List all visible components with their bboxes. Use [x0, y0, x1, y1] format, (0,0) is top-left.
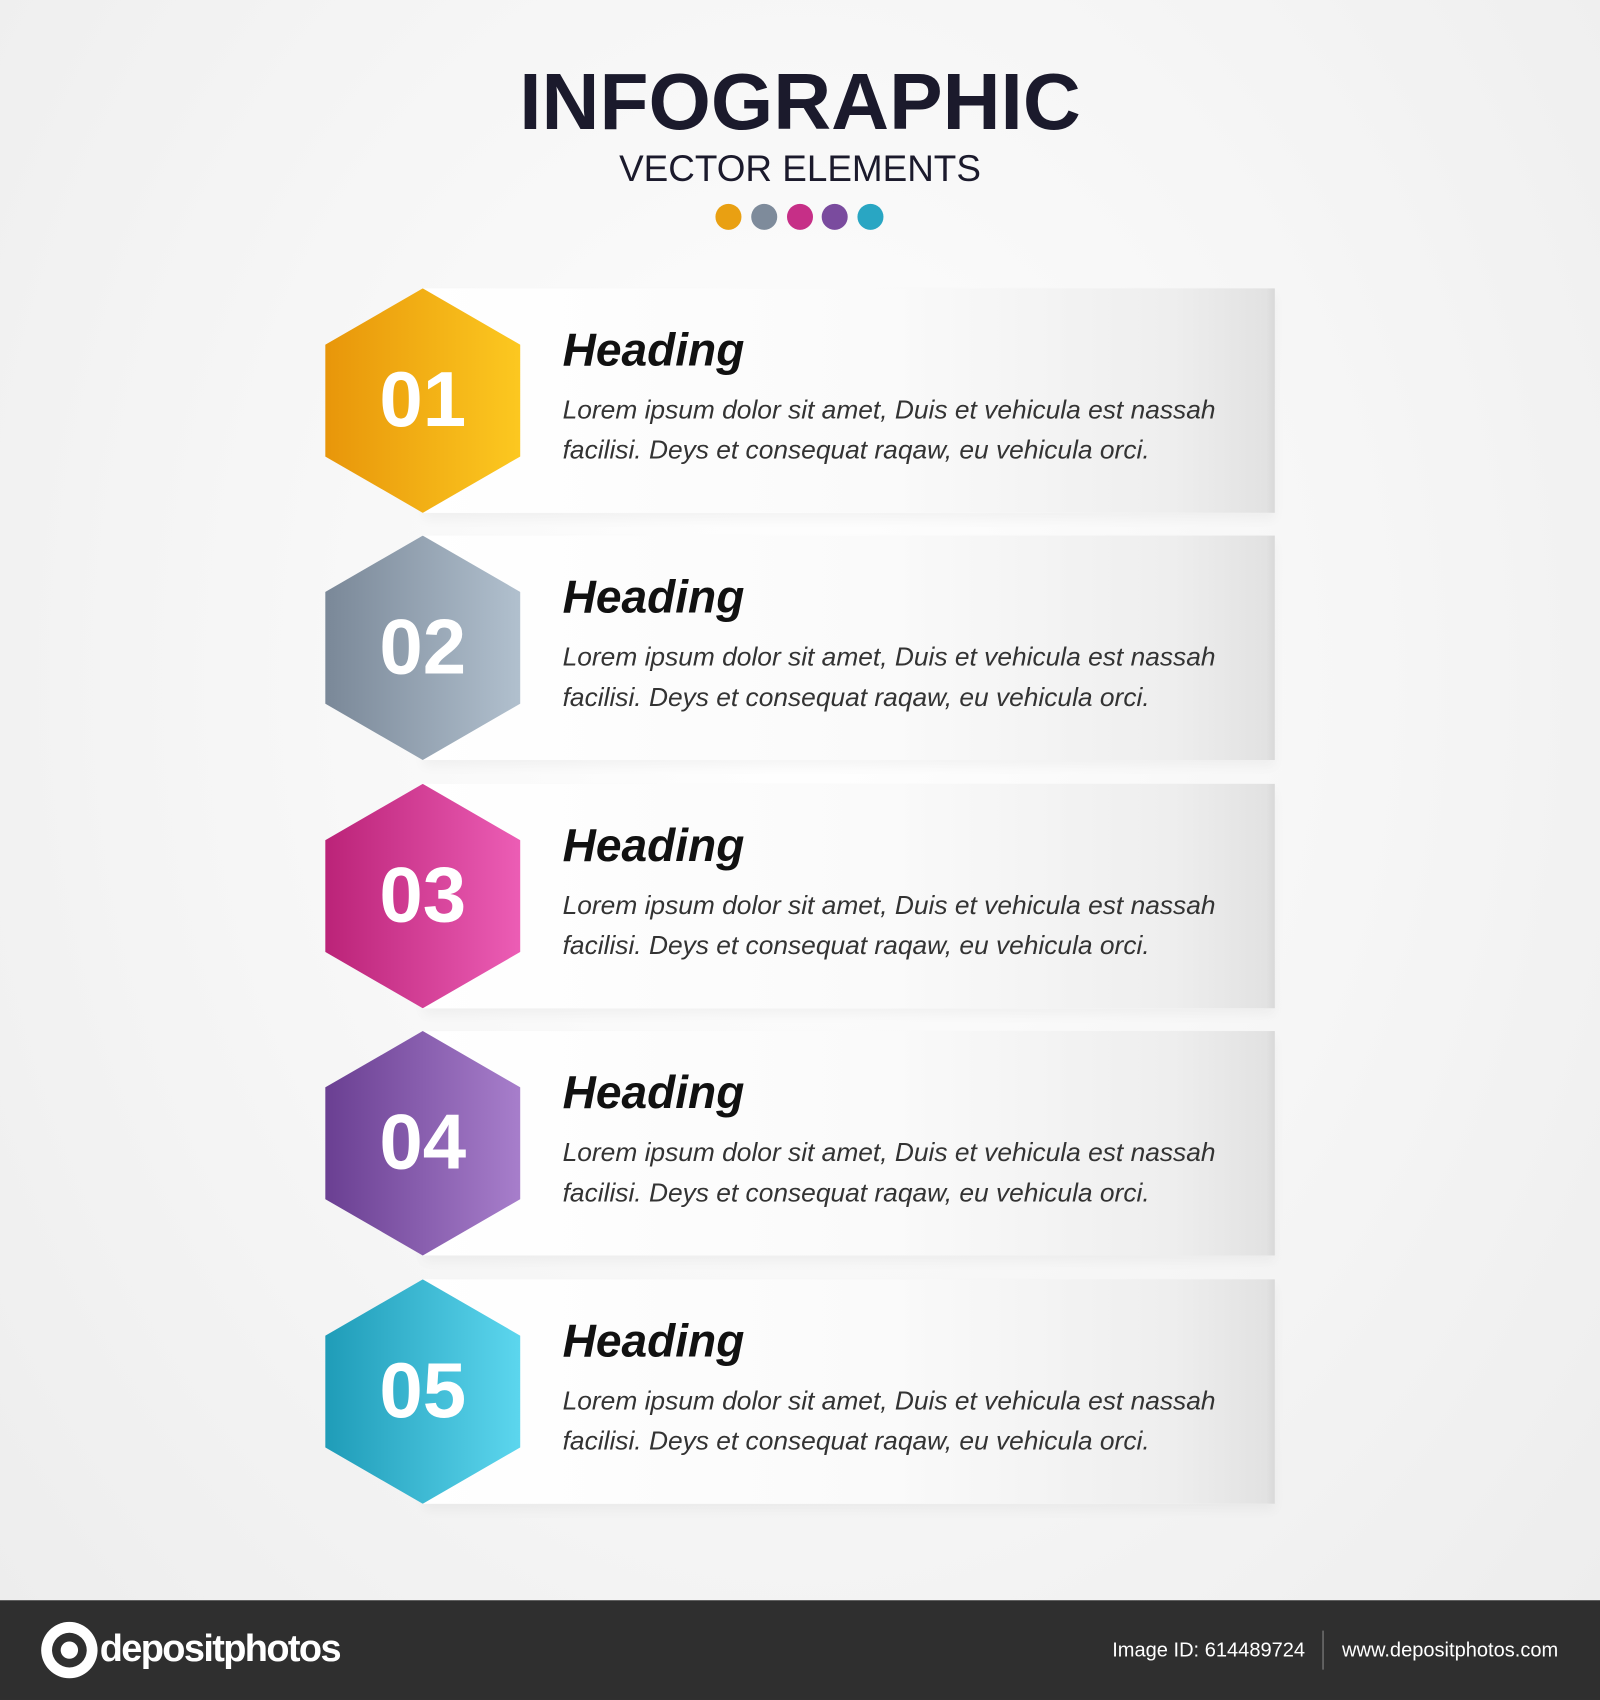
- text 03: [563, 891, 1216, 961]
- hexagon 02: [325, 536, 520, 760]
- text 01: facilisi. Deys et consequat raqaw, eu vehicula orci.: [563, 436, 1150, 465]
- step 02: [325, 536, 1275, 760]
- heading 01: Heading: [563, 325, 744, 376]
- text 04: Lorem ipsum dolor sit amet, Duis et vehicula est nassah: [563, 1138, 1216, 1168]
- text 03: Lorem ipsum dolor sit amet, Duis et vehicula est nassah: [563, 891, 1216, 920]
- step 03: [325, 784, 1275, 1008]
- step 01: [325, 288, 1275, 513]
- step 02: 02: [379, 604, 466, 691]
- step 04: 04: [379, 1099, 466, 1186]
- text 05: [563, 1387, 1216, 1456]
- hexagon 04: [325, 1031, 520, 1256]
- footer bar: [0, 1600, 1600, 1700]
- image id: Image ID: 614489724: [1112, 1638, 1305, 1661]
- logo icon: [41, 1622, 98, 1678]
- step 05: [325, 1279, 1275, 1504]
- text 04: facilisi. Deys et consequat raqaw, eu vehicula orci.: [563, 1179, 1150, 1208]
- hexagon 03: [325, 784, 520, 1008]
- color dots: [715, 204, 884, 230]
- hexagon 05: [325, 1280, 520, 1504]
- text 03: facilisi. Deys et consequat raqaw, eu vehicula orci.: [563, 931, 1150, 961]
- text 01: Lorem ipsum dolor sit amet, Duis et vehicula est nassah: [563, 396, 1216, 425]
- title: INFOGRAPHIC: [519, 56, 1081, 146]
- heading 03: Heading: [563, 821, 744, 872]
- heading 05: Heading: [563, 1316, 744, 1367]
- text 02: facilisi. Deys et consequat raqaw, eu vehicula orci.: [563, 683, 1150, 712]
- step 05: 05: [379, 1348, 466, 1434]
- text 01: [563, 396, 1216, 465]
- step 04: [325, 1031, 1275, 1256]
- heading 02: Heading: [563, 572, 744, 623]
- text 05: facilisi. Deys et consequat raqaw, eu vehicula orci.: [563, 1427, 1150, 1456]
- heading 04: Heading: [563, 1068, 744, 1119]
- text 05: Lorem ipsum dolor sit amet, Duis et vehicula est nassah: [563, 1387, 1216, 1416]
- hexagon 01: [325, 288, 520, 513]
- step 01: 01: [379, 357, 466, 443]
- text 02: [563, 643, 1216, 712]
- website: www.depositphotos.com: [1342, 1638, 1558, 1661]
- text 04: [563, 1138, 1216, 1208]
- subtitle: VECTOR ELEMENTS: [619, 149, 981, 190]
- text 02: Lorem ipsum dolor sit amet, Duis et vehicula est nassah: [563, 643, 1216, 672]
- logo text: depositphotos: [100, 1627, 340, 1670]
- step 03: 03: [379, 852, 466, 939]
